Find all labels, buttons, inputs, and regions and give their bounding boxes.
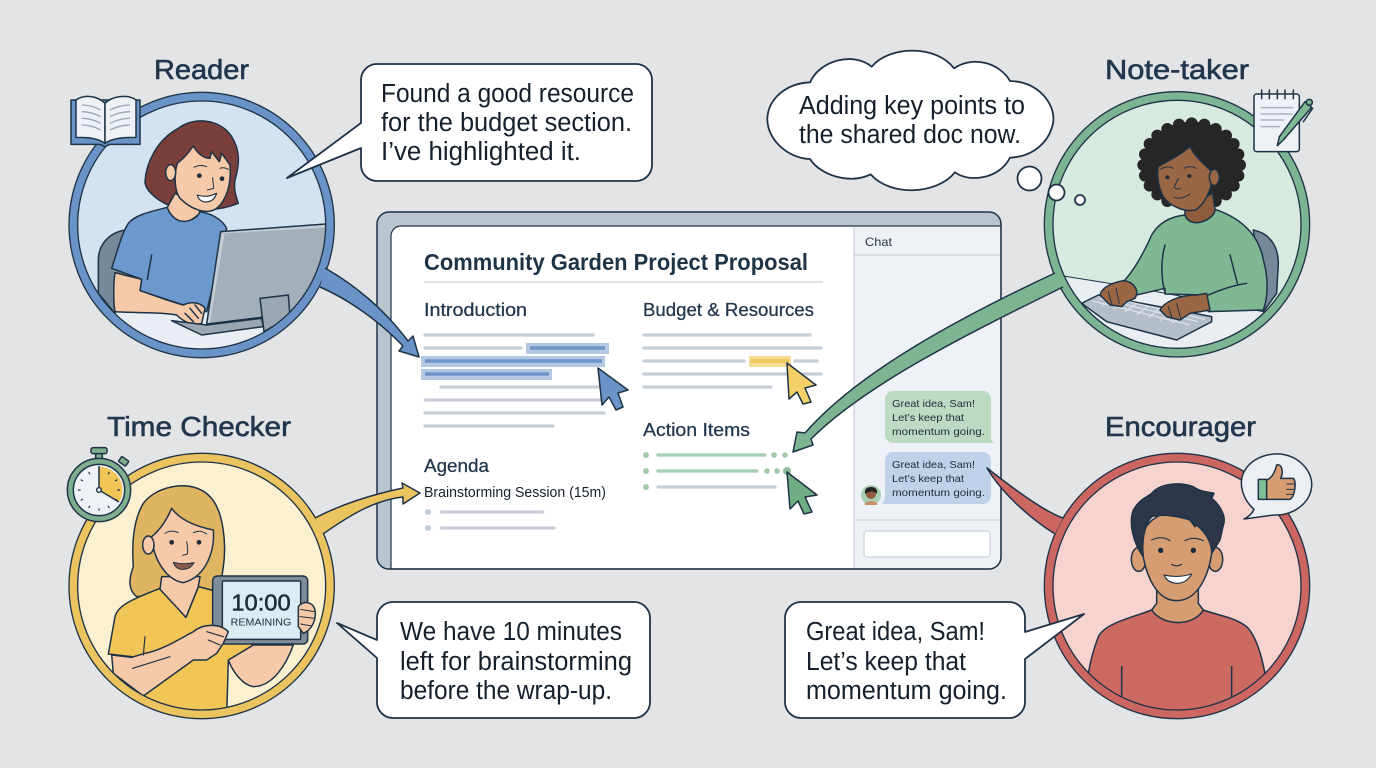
arrow: Reader to introduction <box>320 268 419 357</box>
section: budget and resources: Budget & Resources <box>643 300 814 320</box>
section: introduction: Introduction <box>424 300 527 320</box>
speech bubble: Reader <box>287 64 652 181</box>
speech bubble: Time Checker: before the wrap-up. <box>400 677 612 705</box>
chat message: green: Great idea, Sam! <box>892 398 975 410</box>
chat panel <box>854 227 1000 568</box>
portrait: Time Checker <box>67 448 334 719</box>
section: introduction <box>421 300 609 426</box>
arrow: Note-taker to action items <box>793 273 1063 452</box>
chat message: green: momentum going. <box>892 426 985 438</box>
icon: open book <box>71 96 140 147</box>
speech bubble: Reader: I’ve highlighted it. <box>381 138 581 166</box>
role heading: Note-taker: Note-taker <box>1105 54 1249 85</box>
section: budget and resources <box>643 300 821 387</box>
document window <box>67 51 1313 719</box>
chat message: blue <box>881 452 991 504</box>
tablet timer text: 10:00 <box>231 590 291 616</box>
section: agenda <box>424 456 606 531</box>
chat message: green: Let’s keep that <box>892 412 964 424</box>
speech bubble: Time Checker <box>337 602 650 718</box>
chat avatar <box>861 485 881 505</box>
section: action items: Action Items <box>643 420 750 440</box>
chat message: blue: Great idea, Sam! <box>892 459 975 471</box>
speech bubble: Time Checker: We have 10 minutes <box>400 618 622 646</box>
cursor: blue <box>598 368 628 410</box>
document title: Community Garden Project Proposal <box>424 249 808 275</box>
portrait: Note-taker <box>1044 90 1313 360</box>
chat input <box>864 531 990 557</box>
thought cloud: Note-taker: Adding key points to <box>799 92 1025 120</box>
cursor: yellow <box>787 363 816 404</box>
speech bubble: Reader: Found a good resource <box>381 80 634 108</box>
section: action items <box>643 420 791 490</box>
chat message: green <box>885 391 994 443</box>
speech bubble: Encourager: Let’s keep that <box>806 648 966 676</box>
chat panel: Chat <box>865 235 893 249</box>
role heading: Encourager: Encourager <box>1105 411 1256 442</box>
role heading: Reader: Reader <box>154 54 249 85</box>
role heading: Time Checker: Time Checker <box>107 411 291 442</box>
portrait: Reader <box>69 92 334 360</box>
portrait: Time Checker: REMAINING <box>231 617 292 628</box>
thought cloud: Note-taker <box>767 51 1085 205</box>
thought cloud: Note-taker: the shared doc now. <box>799 121 1021 149</box>
cursor: green <box>787 472 817 514</box>
icon: stopwatch <box>67 448 131 522</box>
speech bubble: Reader: for the budget section. <box>381 109 632 137</box>
speech bubble: Encourager: Great idea, Sam! <box>806 618 985 646</box>
chat message: blue: momentum going. <box>892 487 985 499</box>
speech bubble: Encourager: momentum going. <box>806 677 1007 705</box>
portrait: Encourager <box>1044 453 1312 719</box>
arrow: Time Checker to agenda <box>315 483 420 534</box>
speech bubble: Time Checker: left for brainstorming <box>400 648 632 676</box>
icon: notepad and pen <box>1254 90 1313 152</box>
icon: thumbs-up bubble <box>1241 454 1312 519</box>
speech bubble: Encourager <box>785 602 1084 718</box>
chat message: blue: Let’s keep that <box>892 473 964 485</box>
arrow: Encourager to chat <box>987 468 1063 534</box>
section: agenda: Agenda <box>424 456 490 476</box>
section: agenda: Brainstorming Session (15m) <box>424 485 606 501</box>
